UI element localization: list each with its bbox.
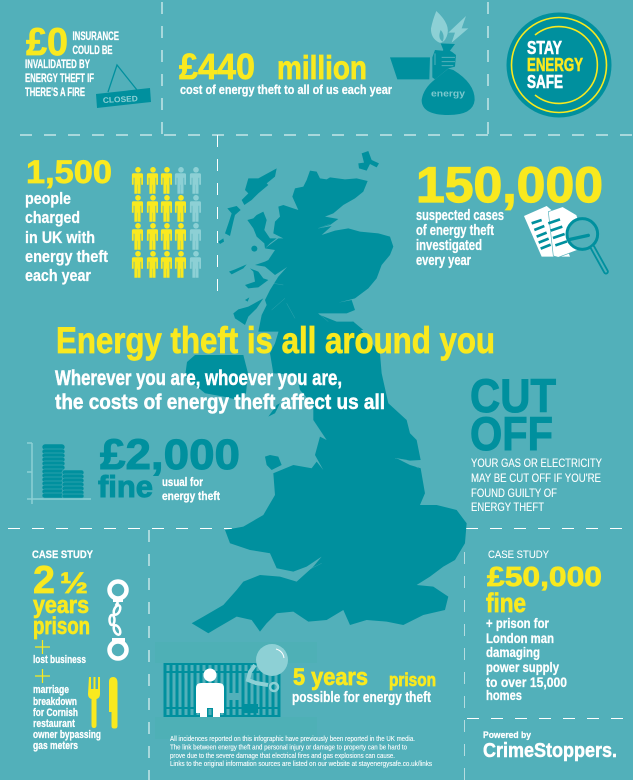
case study: 2.5 years prison: ½: [60, 567, 88, 600]
stat: cut off: OFF: [470, 407, 553, 460]
stat: 5 years prison: possible for energy theft: [292, 689, 431, 706]
stat: 440 million: cost of energy theft to all of us each year: [180, 82, 392, 97]
stat: 440 million: million: [277, 49, 367, 86]
insurance stat: INSURANCE: [72, 31, 119, 43]
title: Energy theft is all around you: [56, 320, 495, 361]
map inlets: [272, 224, 418, 570]
stat: 5 years prison: prison: [389, 670, 436, 690]
case study: 50,000 fine: to over 15,000: [486, 674, 567, 690]
insurance stat: THERE'S A FIRE: [25, 87, 85, 99]
case study: 2.5 years prison: [32, 549, 101, 752]
footnote: The link between energy theft and personal injury or damage to property can be hard to: [170, 742, 407, 752]
subtitle: Wherever you are, whoever you are,: [55, 367, 342, 390]
stat: cut off: CUT: [470, 369, 556, 422]
case study: 2.5 years prison: years: [33, 592, 89, 619]
case study: 50,000 fine: £50,000: [487, 561, 602, 592]
stat: 150,000 cases: investigated: [416, 238, 482, 254]
insurance stat: INVALIDATED BY: [25, 59, 90, 71]
stat: 1,500 people charged: energy theft: [25, 247, 108, 266]
case study: 2.5 years prison: breakdown: [33, 696, 77, 708]
footnote: Links to the original information sources are listed on our website at stayenergysafe.co.uk/links: [170, 759, 432, 768]
logo: stay energy safe: SAFE: [527, 71, 563, 92]
icon: ball and chain: [248, 644, 288, 691]
stat: 150,000 cases: of energy theft: [416, 223, 494, 239]
icon: hand holding energy bag: energy: [431, 89, 465, 99]
logo: stay energy safe: ENERGY: [527, 54, 583, 75]
stat: 1,500 people charged: each year: [25, 266, 91, 285]
stat: 2,000 fine: usual for: [162, 475, 203, 489]
stat: 1,500 people charged: people: [25, 189, 71, 208]
case study: 2.5 years prison: lost business: [33, 654, 86, 666]
stat: cut off: ENERGY THEFT: [471, 500, 545, 514]
stat: 1,500 people charged: charged: [25, 208, 80, 227]
insurance stat: £0: [26, 21, 68, 64]
stat: 440 million: £440: [179, 46, 255, 87]
stat: 2,000 fine: fine: [98, 469, 153, 504]
stat: 150,000 cases: every year: [416, 253, 471, 269]
stat: 2,000 fine: energy theft: [162, 489, 220, 503]
case study: 2.5 years prison: restaurant: [33, 718, 75, 730]
case study: 50,000 fine: damaging: [486, 644, 540, 660]
stat: cut off: FOUND GUILTY OF: [471, 486, 557, 500]
case study: 2.5 years prison: marriage: [33, 684, 69, 696]
case study: 50,000 fine: CASE STUDY: [488, 549, 550, 561]
subtitle: [55, 367, 385, 414]
stat: 5 years prison: 5 years: [293, 664, 368, 691]
stat: cut off: MAY BE CUT OFF IF YOU'RE: [471, 471, 601, 485]
icon: prisoner behind bars: [155, 642, 317, 739]
stat: 150,000 cases: [416, 157, 603, 269]
stat: 2,000 fine: [98, 431, 240, 504]
map of Great Britain: [185, 151, 467, 633]
stat: 1,500 people charged: 1,500: [26, 154, 112, 190]
case study: 2.5 years prison: CASE STUDY: [32, 549, 94, 561]
Scotland and islands: [218, 151, 393, 332]
case study: 2.5 years prison: 2: [33, 559, 55, 602]
stat: 440 million: [179, 46, 392, 97]
case study: 50,000 fine: homes: [486, 687, 522, 703]
case study: 50,000 fine: fine: [486, 588, 526, 618]
footnote: All incidences reported on this infographic have previously been reported in the UK media.: [170, 734, 415, 743]
case study: 2.5 years prison: gas meters: [33, 740, 78, 752]
stat: 150,000 cases: 150,000: [416, 157, 603, 213]
case study: 2.5 years prison: for Cornish: [33, 707, 78, 719]
logo: powered by CrimeStoppers: [483, 730, 617, 762]
logo: stay energy safe: [506, 12, 612, 118]
case study: 2.5 years prison: owner bypassing: [33, 729, 101, 741]
stat: cut off: [470, 369, 602, 514]
icon: fork and knife: [88, 677, 118, 728]
case study: 50,000 fine: power supply: [486, 659, 559, 675]
insurance stat: [25, 21, 119, 99]
pictogram: people: [132, 167, 201, 278]
case study: 2.5 years prison: prison: [33, 613, 90, 640]
icon: coin stacks chart: [27, 443, 91, 504]
logo: powered by CrimeStoppers: Powered by: [483, 730, 531, 740]
case study: 50,000 fine: + prison for: [486, 615, 549, 631]
icon: handcuffs: [110, 582, 126, 658]
icon: documents and magnifier: [524, 206, 606, 272]
stat: 1,500 people charged: [25, 154, 112, 285]
footnote: prove due to the severe damage that electrical fires and gas explosions can cause.: [170, 751, 395, 760]
case study: 50,000 fine: [486, 549, 602, 703]
stat: 1,500 people charged: in UK with: [25, 228, 95, 247]
stat: 2,000 fine: £2,000: [100, 431, 240, 479]
case study: 50,000 fine: London man: [486, 630, 554, 646]
logo: stay energy safe: STAY: [527, 37, 562, 58]
subtitle: the costs of energy theft affect us all: [55, 391, 385, 414]
icon: closed sign: [96, 65, 151, 108]
England, Wales and southern Scotland: [185, 315, 467, 633]
logo: powered by CrimeStoppers: CrimeStoppers.: [483, 740, 617, 762]
icon: closed sign: CLOSED: [103, 94, 138, 105]
icon: hand holding energy bag: [390, 11, 475, 115]
stat: 5 years prison: [292, 664, 436, 706]
insurance stat: ENERGY THEFT IF: [25, 73, 94, 85]
footnote: [170, 734, 432, 768]
stat: cut off: YOUR GAS OR ELECTRICITY: [471, 456, 602, 470]
insurance stat: COULD BE: [72, 45, 113, 57]
stat: 150,000 cases: suspected cases: [416, 208, 504, 224]
